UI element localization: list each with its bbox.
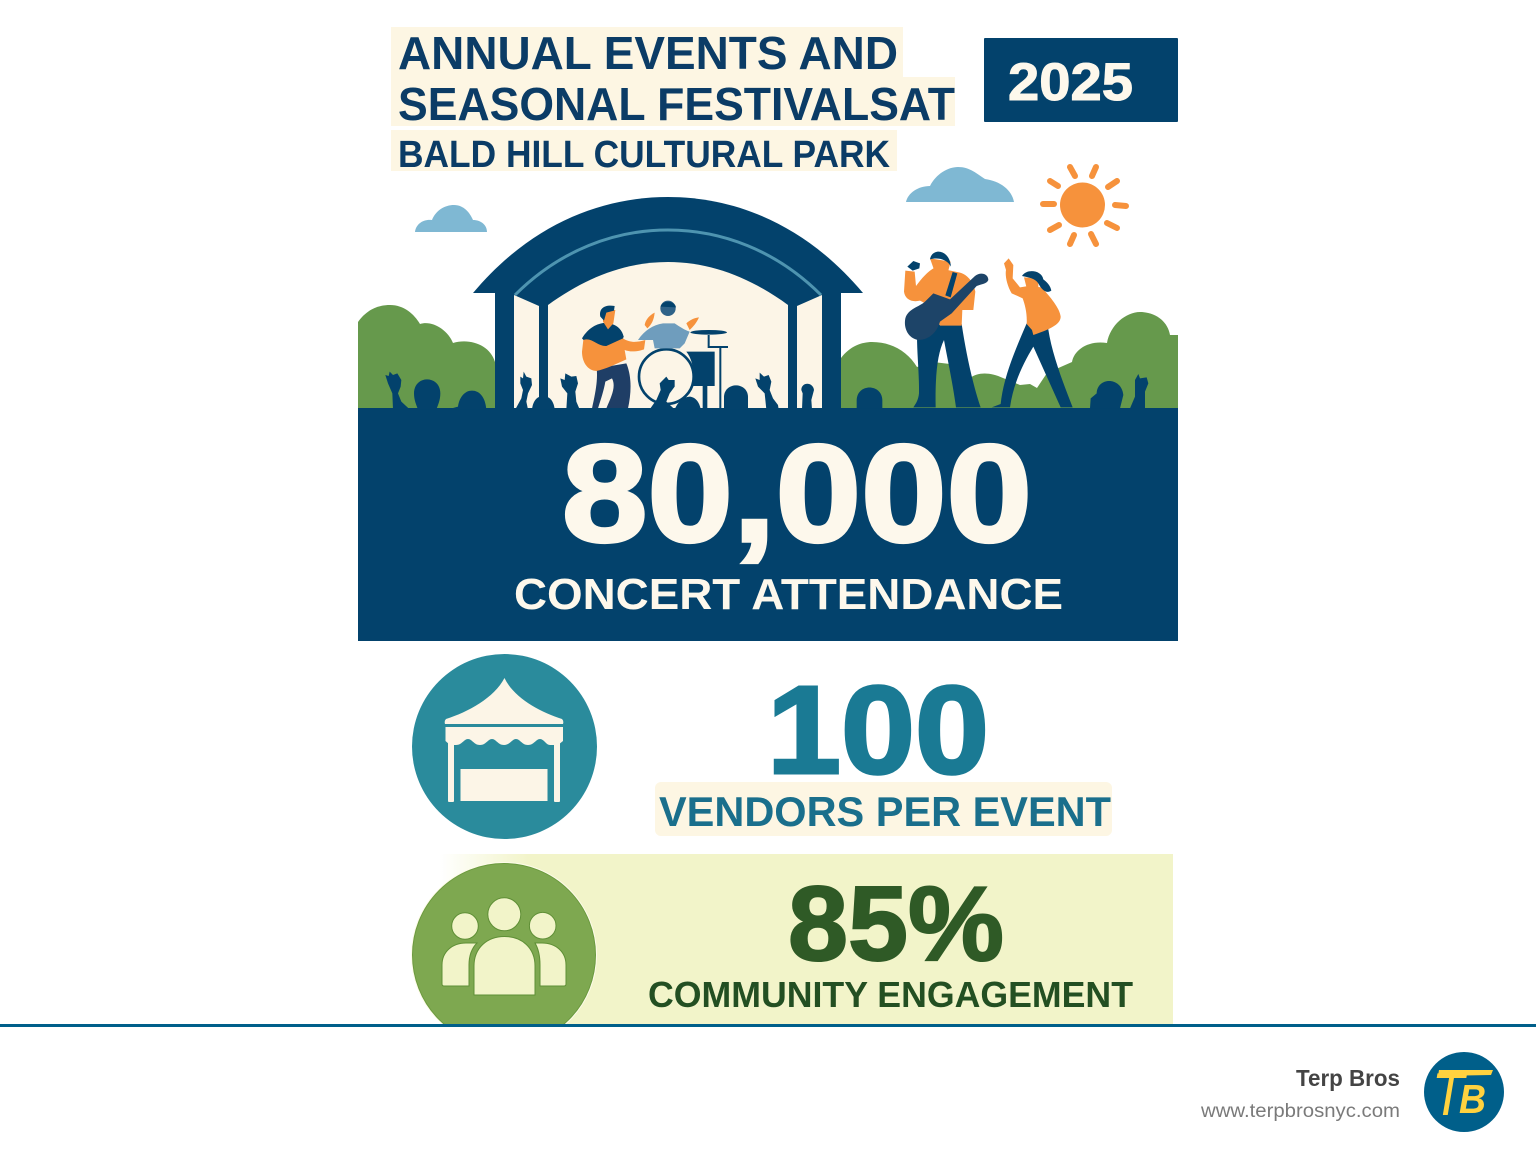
crowd silhouettes right (857, 374, 1148, 408)
right trees (841, 312, 1178, 408)
stat: 100 vendors per event (655, 661, 1112, 836)
title: SEASONAL FESTIVALSAT (398, 78, 955, 130)
stat: 100 vendors per event: VENDORS PER EVENT (659, 788, 1111, 835)
icon: right cloud (906, 167, 1014, 202)
stat: 100 vendors per event: 100 (767, 661, 989, 800)
head (930, 258, 951, 273)
footer (0, 1024, 1536, 1154)
stat: 85% community engagement (648, 865, 1133, 1015)
torso and arm (1004, 258, 1061, 335)
right dancer (992, 258, 1073, 407)
stat: 80,000 concert attendance: CONCERT ATTENDANCE (514, 570, 1063, 619)
head (1024, 277, 1038, 288)
torso and arm (904, 267, 975, 326)
main banner (358, 408, 1178, 641)
right wing panel (797, 295, 822, 408)
microphone (907, 261, 920, 271)
left wing panel (514, 295, 539, 408)
icon: vendor tent (412, 654, 597, 839)
right guitarist (904, 252, 988, 407)
stage musicians (582, 301, 728, 409)
stat: 80,000 concert attendance: 80,000 (562, 417, 1032, 571)
logo: T (1432, 1061, 1468, 1128)
logo (1424, 1052, 1504, 1132)
year badge: 2025 (1008, 53, 1133, 112)
left trees (358, 305, 495, 408)
crowd silhouettes left and stage (385, 372, 814, 409)
guitar (905, 274, 988, 340)
stat: 85% community engagement: 85% (788, 865, 1004, 983)
website: www.terpbrosnyc.com (1200, 1100, 1400, 1122)
stage inner arch (548, 262, 788, 408)
roof light arc (515, 230, 821, 295)
drum kit (639, 330, 728, 409)
icon: community group (411, 862, 597, 1048)
bandshell stage (473, 197, 863, 410)
title (391, 27, 955, 176)
strap (945, 272, 957, 297)
title: ANNUAL EVENTS AND (398, 27, 898, 79)
legs (992, 322, 1073, 407)
legs (913, 324, 981, 407)
brand name: Terp Bros (1296, 1065, 1400, 1091)
logo: B (1459, 1076, 1486, 1122)
guitarist on stage (582, 306, 645, 408)
drummer (638, 301, 699, 348)
stat: 80,000 concert attendance (514, 417, 1063, 619)
icon: left cloud (415, 205, 487, 232)
icon: sun (1043, 167, 1126, 244)
panel: community engagement (440, 854, 1173, 1024)
stat: 85% community engagement: COMMUNITY ENGAGEMENT (648, 974, 1133, 1015)
year badge (984, 38, 1178, 122)
title: BALD HILL CULTURAL PARK (398, 134, 891, 176)
